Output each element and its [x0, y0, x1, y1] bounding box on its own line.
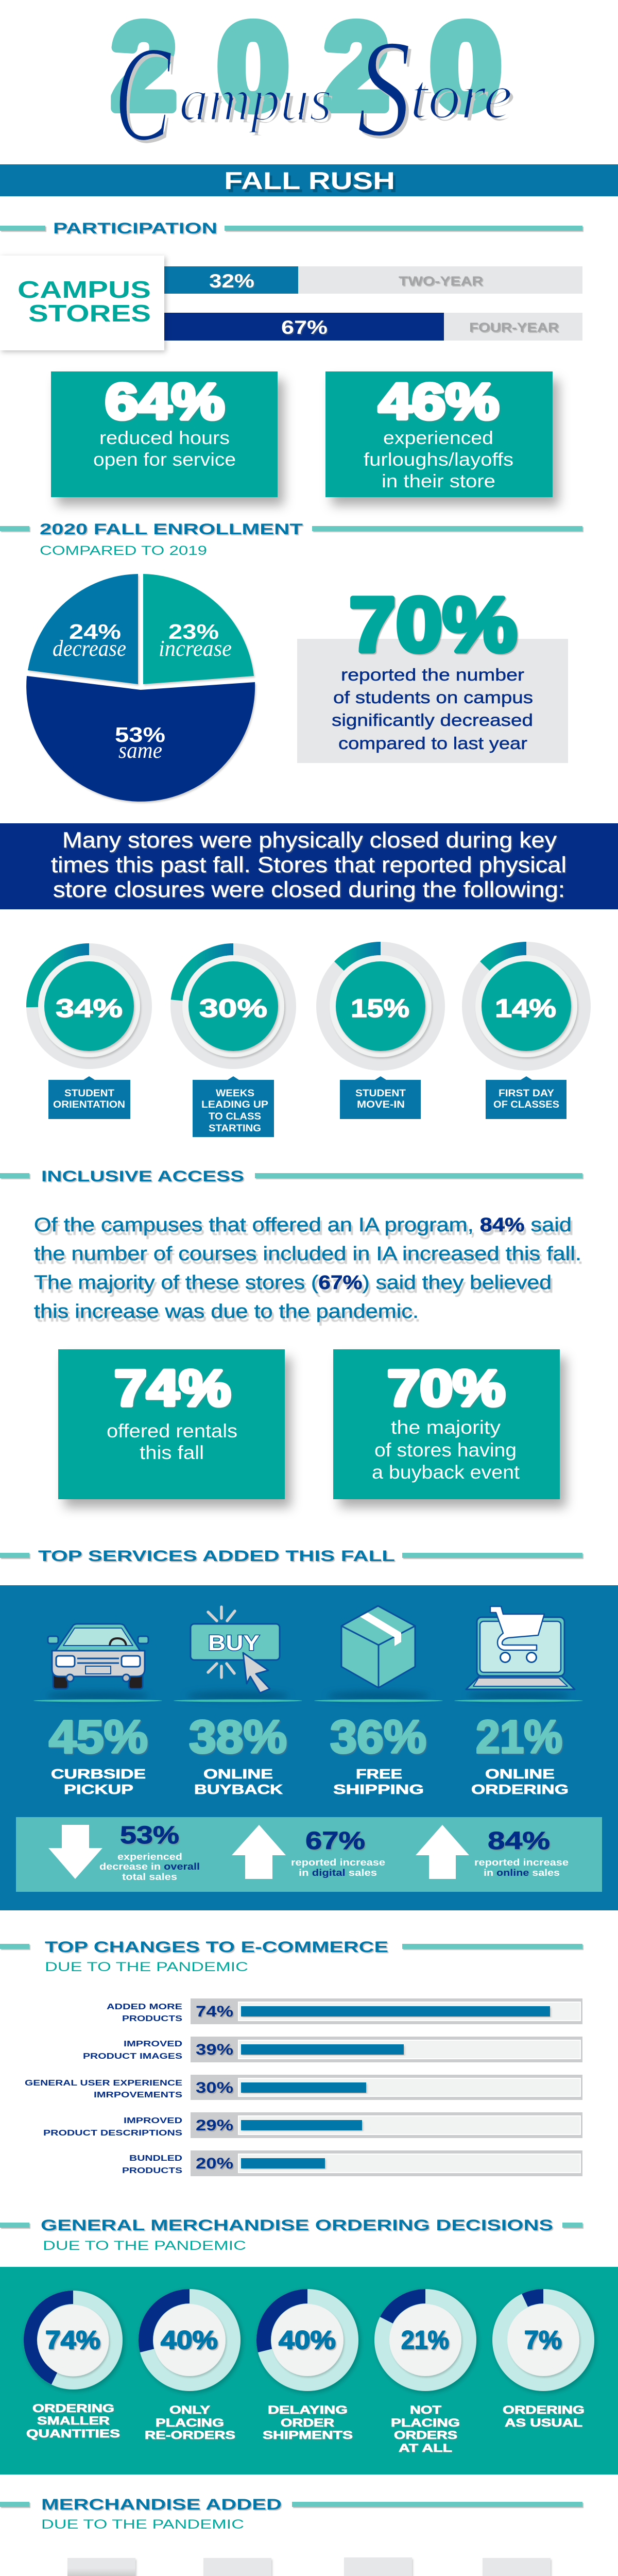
stat: 45% curbside pickup: 45%: [49, 1711, 148, 1763]
heading: 2020 Fall Enrollment: [0, 521, 582, 538]
stat: 21% online ordering: ONLINE: [485, 1766, 555, 1782]
bar: two-year: 32%: [209, 270, 254, 292]
icon: package box: [341, 1606, 415, 1688]
donut: 14% first day of classes: 14%: [495, 994, 556, 1023]
ground shadows: [46, 1691, 570, 1701]
callout: 70% students decreased: compared to last year: [338, 734, 527, 753]
banner: physically closed stores: times this past fall. Stores that reported physical: [51, 853, 566, 877]
label: weeks leading up to class starting: STARTING: [209, 1123, 261, 1134]
pie chart: enrollment: same: [118, 738, 162, 763]
row: improved product descriptions: PRODUCT DESCRIPTIONS: [43, 2129, 182, 2138]
stat: 36% free shipping: [330, 1711, 426, 1797]
script title Campus Store: tore: [410, 61, 512, 132]
bar chart: e-commerce changes: [25, 1998, 582, 2176]
column chart: merchandise added: [51, 2557, 572, 2576]
stat card: 64%: [51, 371, 278, 497]
row: improved product images: PRODUCT IMAGES: [83, 2052, 182, 2061]
row: general user experience improvements: 30%: [196, 2079, 233, 2096]
donut: 21% not placing orders at all: NOT: [410, 2403, 442, 2416]
row: improved product descriptions: 29%: [196, 2117, 233, 2134]
stat card: 74%: [58, 1349, 285, 1499]
donut: 74% ordering smaller quantities: 74%: [45, 2326, 100, 2354]
stat card: 46%: experienced: [383, 427, 493, 448]
row: improved product images: [83, 2037, 582, 2062]
label: student move-in: MOVE-IN: [357, 1099, 405, 1110]
stat card: 70%: the majority: [391, 1417, 501, 1438]
row: added more products: ADDED MORE: [107, 2003, 182, 2011]
paragraph: inclusive access: Of the campuses that offered an IA program, 84% said: [34, 1214, 572, 1236]
subheading: due to the pandemic: DUE TO THE PANDEMIC: [45, 1960, 248, 1974]
callout: 70% students decreased: [297, 581, 568, 763]
heading: Inclusive Access: [0, 1168, 582, 1185]
donut: 40% delaying order shipments: SHIPMENTS: [263, 2429, 353, 2442]
stat card: 70%: a buyback event: [372, 1462, 520, 1483]
donut: 7% ordering as usual: AS USUAL: [505, 2416, 582, 2429]
donut: 21% not placing orders at all: 21%: [401, 2326, 449, 2354]
stat: 67% increase in digital sales: 67%: [305, 1827, 365, 1855]
row: bundled products: PRODUCTS: [122, 2166, 182, 2175]
stat: 36% free shipping: 36%: [330, 1711, 426, 1763]
slice: increase: [143, 574, 254, 684]
stat: 84% increase in online sales: in online sales: [484, 1868, 560, 1878]
pie chart: enrollment: increase: [159, 636, 232, 661]
card: campus stores: STORES: [28, 300, 151, 327]
stat card: 64%: open for service: [93, 449, 236, 470]
column: disposable masks 56%: [324, 2557, 434, 2576]
label: weeks leading up to class starting: TO CLASS: [209, 1111, 261, 1122]
pie chart: enrollment: 24%: [69, 620, 121, 643]
banner: physically closed stores: [0, 823, 618, 909]
row: bundled products: 20%: [196, 2155, 233, 2172]
stat card: 70%: of stores having: [374, 1439, 517, 1461]
stat: 53% decrease in overall sales: decrease in overall: [99, 1861, 200, 1872]
row: bundled products: BUNDLED: [129, 2154, 182, 2163]
donut: 40% only placing re-orders: PLACING: [156, 2416, 224, 2429]
paragraph: inclusive access: [34, 1214, 581, 1323]
donut: 74% ordering smaller quantities: [24, 2291, 123, 2440]
bar: four-year: 67%: [281, 317, 328, 338]
subheading: due to the pandemic: DUE TO THE PANDEMIC: [43, 2239, 246, 2253]
stat: 36% free shipping: FREE: [356, 1766, 402, 1782]
row: added more products: 74%: [196, 2003, 233, 2020]
icon: buy button with cursor: BUY: [208, 1631, 260, 1655]
card: campus stores: CAMPUS: [18, 276, 151, 303]
stat: 38% online buyback: BUYBACK: [194, 1782, 283, 1797]
donut: 14% first day of classes: [462, 942, 591, 1071]
big year 2020: 2: [324, 0, 389, 134]
label: first day of classes: FIRST DAY: [499, 1088, 554, 1099]
callout: 70% students decreased: 70%: [349, 581, 517, 668]
donut: 7% ordering as usual: ORDERING: [503, 2403, 585, 2416]
stat card: 70%: [333, 1349, 560, 1499]
donut: 7% ordering as usual: 7%: [524, 2326, 562, 2354]
donut: 40% only placing re-orders: ONLY: [169, 2403, 210, 2416]
donut: 21% not placing orders at all: AT ALL: [399, 2442, 452, 2454]
stat: 45% curbside pickup: PICKUP: [64, 1782, 133, 1797]
pie chart: enrollment: [26, 574, 255, 802]
heading: Participation: PARTICIPATION: [53, 220, 217, 237]
stat card: 64%: 64%: [105, 373, 225, 430]
donut: 34% student orientation: 34%: [56, 994, 123, 1023]
label: student orientation: STUDENT: [64, 1088, 114, 1099]
stat card: 70%: 70%: [387, 1360, 505, 1416]
donut: 74% ordering smaller quantities: QUANTITIES: [26, 2427, 120, 2440]
callout: 70% students decreased: significantly decreased: [332, 710, 533, 730]
slice: same: [26, 676, 255, 802]
stat: 38% online buyback: [189, 1711, 287, 1797]
banner: Fall Rush: FALL RUSH: [224, 167, 395, 194]
callout: 70% students decreased: of students on campus: [333, 688, 533, 707]
donut: 30% weeks leading up: [170, 943, 296, 1069]
paragraph: inclusive access: The majority of these stores ( 67%) said they believed: [34, 1272, 552, 1294]
panel: top services: [0, 1585, 618, 1910]
stat card: 64%: reduced hours: [99, 427, 230, 448]
stat: 84% increase in online sales: reported increase: [474, 1857, 569, 1868]
donut: 74% ordering smaller quantities: ORDERING: [32, 2402, 114, 2415]
stat: 21% online ordering: ORDERING: [471, 1782, 569, 1797]
icon: buy button with cursor: [191, 1607, 280, 1693]
stat card: 74%: 74%: [114, 1360, 231, 1416]
big year 2020: 2: [112, 0, 176, 134]
column: additional cleaning supplies 40%: [462, 2558, 572, 2576]
row: general user experience improvements: IMRPOVEMENTS: [94, 2091, 182, 2099]
stat card: 46%: in their store: [382, 470, 495, 492]
title: 2020 Campus Store: [112, 0, 512, 170]
stat: 21% online ordering: [471, 1711, 569, 1797]
donut: 40% delaying order shipments: 40%: [279, 2326, 336, 2354]
heading: Top Services Added: [0, 1548, 582, 1565]
row: added more products: PRODUCTS: [122, 2014, 182, 2023]
row: general user experience improvements: GENERAL USER EXPERIENCE: [25, 2079, 182, 2088]
big year 2020: 0: [218, 0, 288, 134]
panel: sales changes strip: [16, 1817, 602, 1892]
pie chart: enrollment: decrease: [53, 636, 126, 661]
bar: two-year: TWO-YEAR: [399, 274, 483, 289]
label: weeks leading up to class starting: LEADING UP: [201, 1099, 268, 1110]
script title Campus Store: ampus: [179, 66, 347, 133]
stat: 45% curbside pickup: CURBSIDE: [51, 1766, 146, 1782]
label: first day of classes: [486, 1076, 566, 1119]
label: weeks leading up to class starting: WEEKS: [216, 1088, 254, 1099]
heading: Top Services Added: TOP SERVICES ADDED THIS FALL: [38, 1548, 395, 1565]
donut: 40% only placing re-orders: 40%: [161, 2326, 218, 2354]
stat card: 74%: this fall: [140, 1442, 204, 1463]
label: weeks leading up to class starting: [193, 1076, 274, 1137]
stat: 38% online buyback: ONLINE: [203, 1766, 273, 1782]
paragraph: inclusive access: this increase was due to the pandemic.: [34, 1301, 419, 1323]
stat card: 46%: 46%: [379, 373, 499, 430]
participation bars: [0, 256, 582, 350]
pie chart: enrollment: 53%: [115, 723, 165, 747]
stat card: 74%: offered rentals: [107, 1420, 237, 1442]
subheading: compared to 2019: COMPARED TO 2019: [40, 544, 207, 558]
stat: 84% increase in online sales: [474, 1827, 569, 1878]
heading: Merchandise Added: [0, 2496, 582, 2513]
subheading: due to the pandemic: DUE TO THE PANDEMIC: [41, 2517, 244, 2532]
heading: Participation: [0, 220, 582, 237]
arrow: up digital: [232, 1825, 286, 1879]
heading: Top Changes to E-Commerce: TOP CHANGES TO E-COMMERCE: [45, 1939, 388, 1956]
heading: Merchandise Added: MERCHANDISE ADDED: [41, 2496, 282, 2513]
donut: 40% only placing re-orders: [139, 2289, 241, 2442]
stat: 67% increase in digital sales: in digital sales: [299, 1868, 377, 1878]
script title Campus Store: C: [114, 19, 173, 170]
row: improved product descriptions: [43, 2112, 582, 2138]
card: campus stores: [0, 256, 164, 350]
stat: 53% decrease in overall sales: experienced: [117, 1852, 182, 1862]
label: student orientation: ORIENTATION: [53, 1099, 125, 1110]
panel: merchandise ordering decisions: [0, 2267, 618, 2475]
stat: 84% increase in online sales: 84%: [488, 1827, 550, 1855]
paragraph: inclusive access: the number of courses included in IA increased this fall.: [34, 1243, 581, 1265]
stat: 53% decrease in overall sales: total sales: [122, 1872, 177, 1882]
banner: physically closed stores: store closures were closed during the following:: [53, 877, 565, 902]
stat: 38% online buyback: 38%: [189, 1711, 287, 1763]
heading: Inclusive Access: INCLUSIVE ACCESS: [41, 1168, 244, 1185]
bar: four-year: [164, 313, 582, 341]
heading: General Merchandise Ordering Decisions: GENERAL MERCHANDISE ORDERING DECISIONS: [41, 2217, 553, 2234]
donut: 7% ordering as usual: [492, 2289, 594, 2429]
donut: 40% only placing re-orders: RE-ORDERS: [145, 2429, 235, 2442]
stat: 53% decrease in overall sales: [99, 1822, 200, 1882]
heading: Top Changes to E-Commerce: [0, 1939, 582, 1956]
row: improved product descriptions: IMPROVED: [124, 2116, 182, 2125]
donut: 74% ordering smaller quantities: SMALLER: [37, 2414, 110, 2427]
row: improved product images: 39%: [196, 2041, 233, 2058]
stat: 21% online ordering: 21%: [476, 1711, 562, 1763]
stat card: 46%: [325, 371, 553, 497]
donut: 34% student orientation: [26, 943, 152, 1069]
donut: 21% not placing orders at all: PLACING: [391, 2416, 460, 2429]
donut: 40% delaying order shipments: DELAYING: [268, 2403, 348, 2416]
row: added more products: [107, 1998, 582, 2024]
icon: car: [48, 1624, 148, 1689]
donut: 21% not placing orders at all: ORDERS: [394, 2429, 457, 2442]
heading: General Merchandise Ordering Decisions: [0, 2217, 582, 2234]
stat: 53% decrease in overall sales: 53%: [120, 1822, 179, 1849]
big year 2020: [112, 0, 501, 134]
banner: Fall Rush: [0, 164, 618, 196]
donut: 30% weeks leading up: 30%: [199, 994, 267, 1023]
label: student move-in: STUDENT: [355, 1088, 406, 1099]
row: bundled products: [122, 2150, 582, 2176]
heading: 2020 Fall Enrollment: 2020 FALL ENROLLMENT: [40, 521, 303, 538]
arrow: down: [48, 1825, 102, 1879]
label: first day of classes: OF CLASSES: [493, 1099, 559, 1110]
row: general user experience improvements: [25, 2075, 582, 2100]
script title Campus Store: S: [357, 11, 411, 165]
bar: two-year: [164, 266, 582, 294]
column: reusable masks 89%: [51, 2558, 152, 2576]
label: student orientation: [48, 1076, 130, 1119]
row: improved product images: IMPROVED: [124, 2040, 182, 2048]
big year 2020: 0: [431, 0, 501, 134]
donut: 40% delaying order shipments: [256, 2289, 358, 2442]
stat card: 46%: furloughs/layoffs: [364, 449, 513, 470]
arrow: up online: [416, 1825, 469, 1879]
donut: 21% not placing orders at all: [374, 2289, 476, 2454]
column: hand sanitizer 75%: [187, 2558, 287, 2576]
stat: 67% increase in digital sales: reported increase: [291, 1857, 385, 1868]
stat: 67% increase in digital sales: [291, 1827, 385, 1878]
slice: decrease: [28, 574, 138, 684]
pie chart: enrollment: 23%: [168, 620, 219, 643]
icon: laptop with cart: [466, 1606, 575, 1689]
callout: 70% students decreased: reported the number: [341, 665, 524, 684]
stat: 45% curbside pickup: [49, 1711, 148, 1797]
donut: 15% student move-in: [316, 942, 445, 1071]
donut: 40% delaying order shipments: ORDER: [281, 2416, 334, 2429]
banner: physically closed stores: Many stores were physically closed during key: [62, 828, 557, 853]
stat: 36% free shipping: SHIPPING: [333, 1782, 424, 1797]
bar: four-year: FOUR-YEAR: [469, 320, 559, 335]
donut: 15% student move-in: 15%: [351, 994, 409, 1023]
label: student move-in: [340, 1076, 421, 1119]
